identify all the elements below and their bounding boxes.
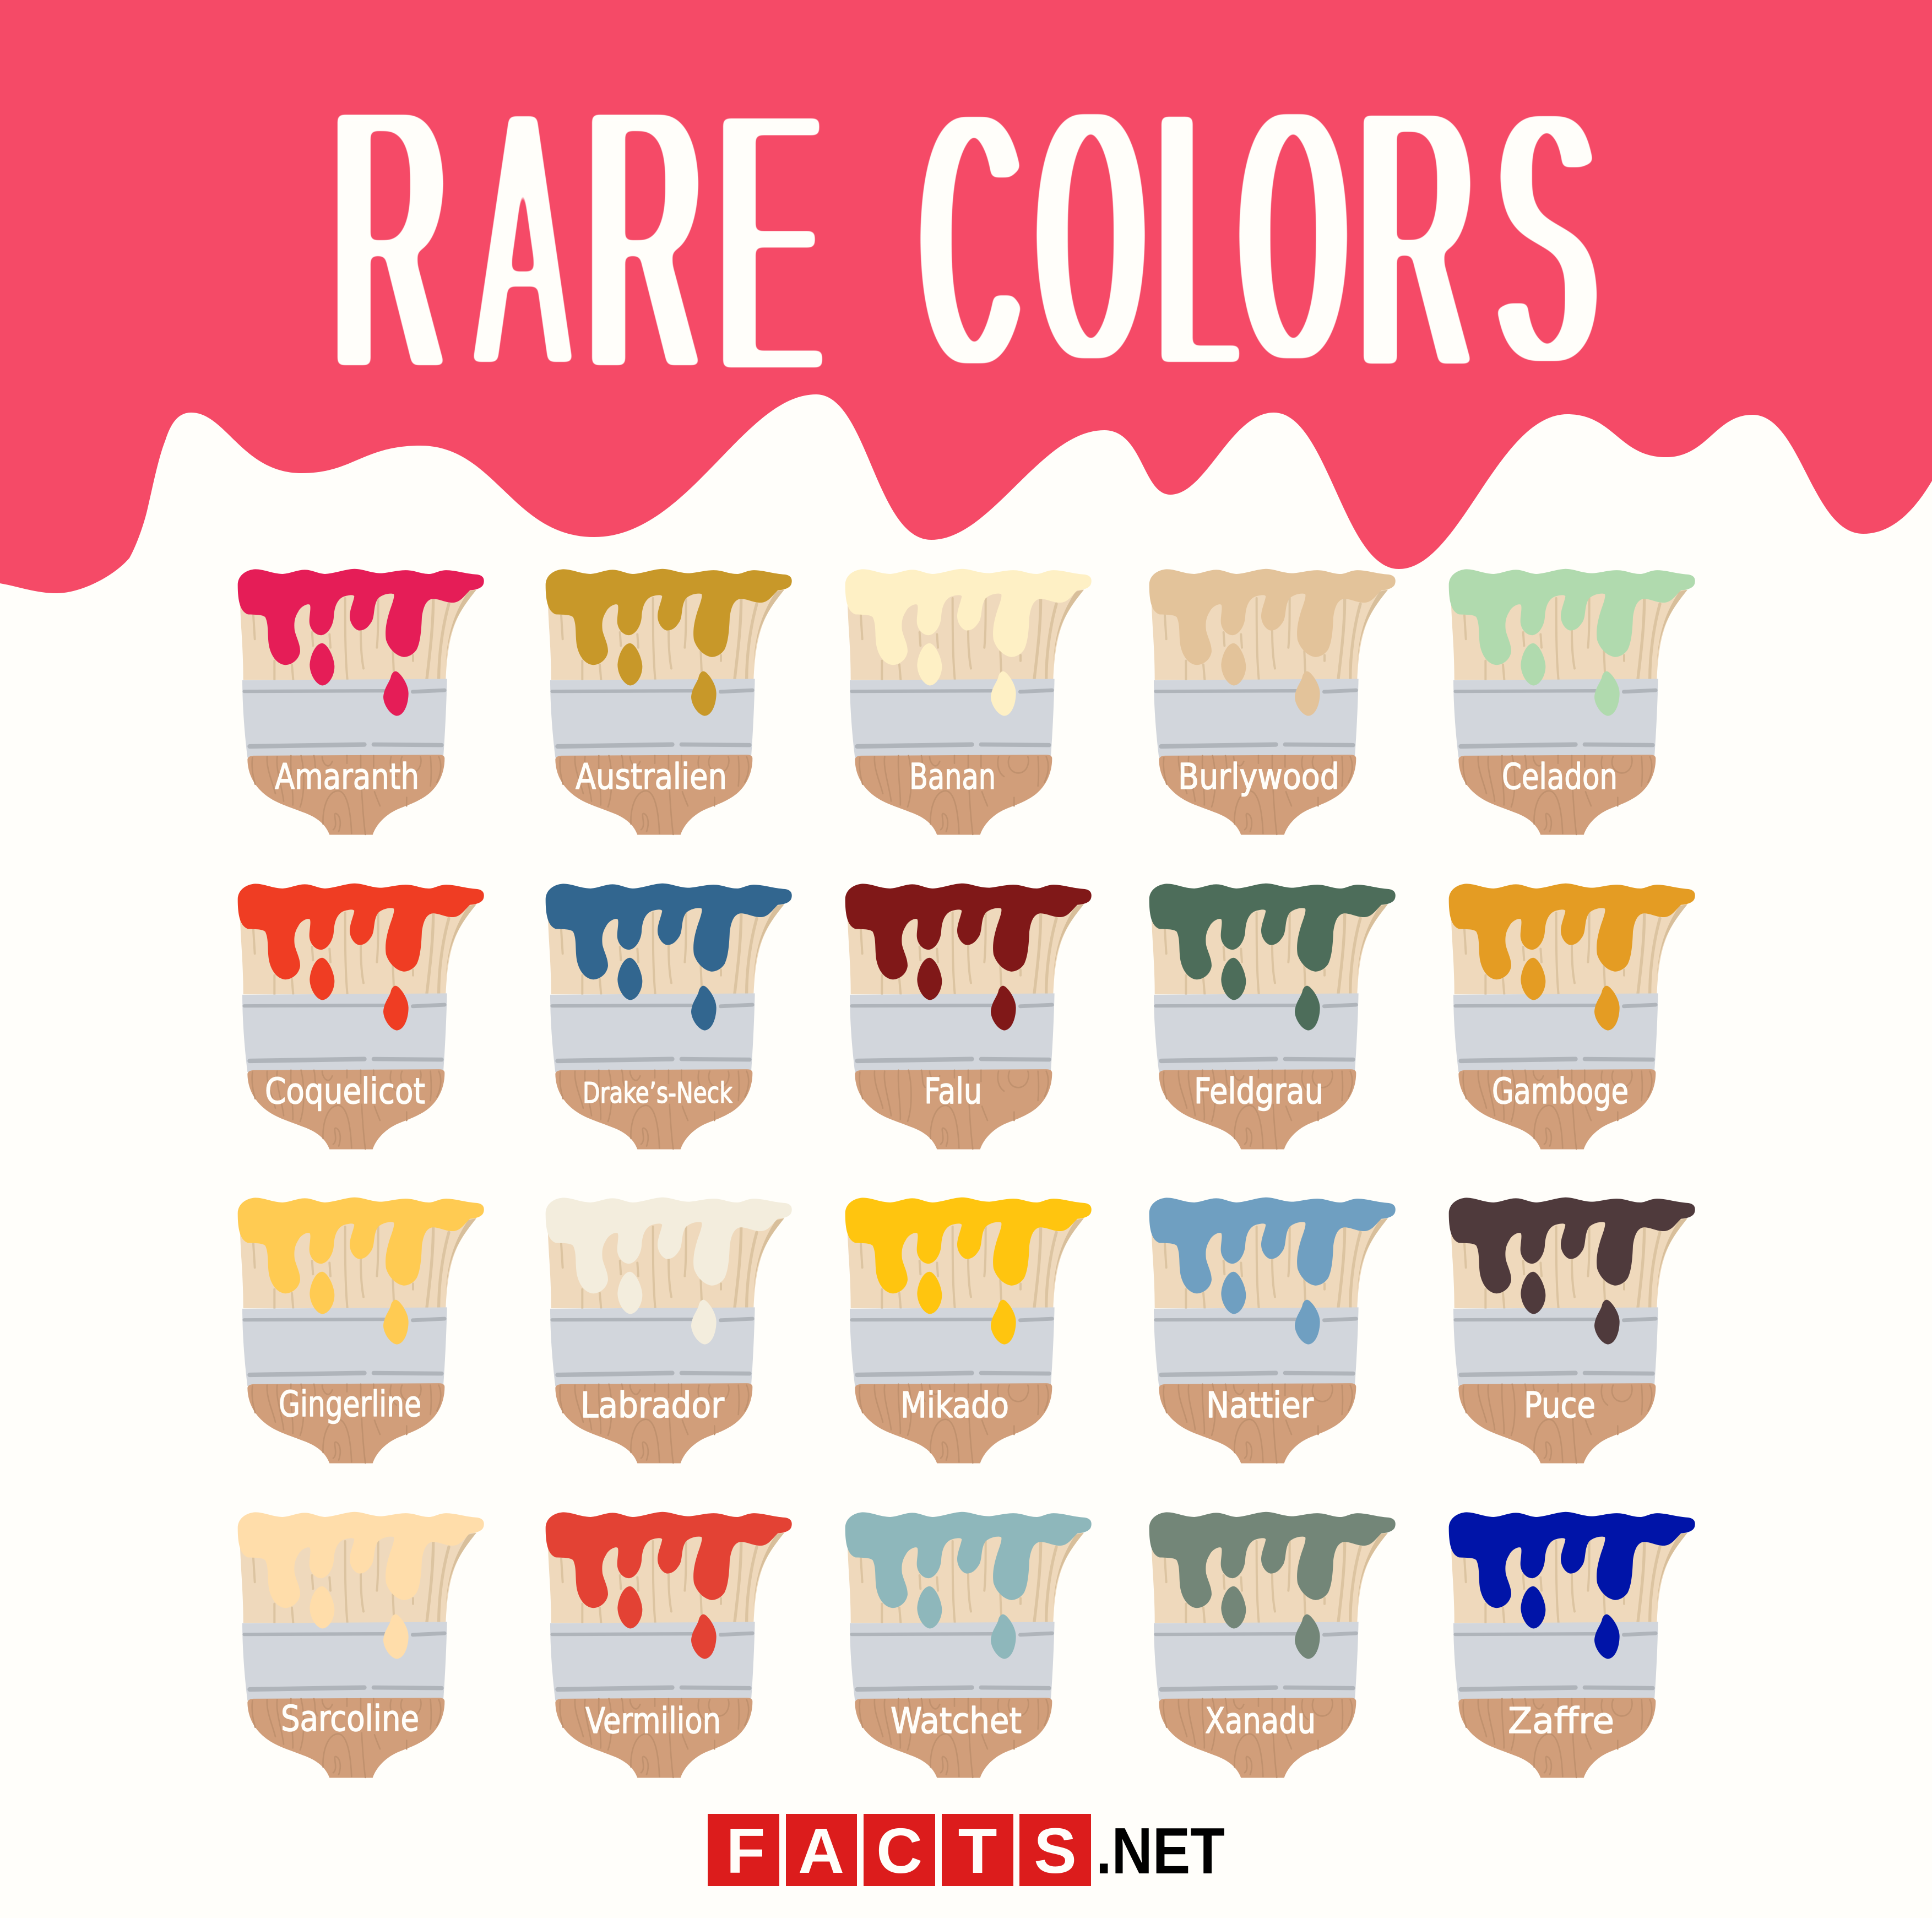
brush: Gingerline xyxy=(238,1198,484,1463)
brush: Coquelicot xyxy=(238,884,484,1149)
logo: Facts.net xyxy=(708,1814,1225,1888)
logo: Facts.net: C xyxy=(876,1815,922,1887)
brush: Puce: Puce xyxy=(1524,1385,1595,1426)
brush: Falu: Falu xyxy=(924,1071,982,1112)
brush: Sarcoline: Sarcoline xyxy=(281,1699,419,1740)
brush: Amaranth: Amaranth xyxy=(275,757,419,798)
brush: Mikado: Mikado xyxy=(900,1385,1009,1426)
brush: Banan xyxy=(845,569,1092,835)
brush: Labrador xyxy=(546,1198,792,1463)
title: R xyxy=(334,26,445,452)
brush: Nattier xyxy=(1149,1198,1396,1463)
brush: Burlywood: Burlywood xyxy=(1178,757,1339,798)
brush: Amaranth xyxy=(238,569,484,835)
brush: Watchet xyxy=(845,1512,1092,1778)
brush: Celadon: Celadon xyxy=(1502,757,1618,798)
brush: Vermilion: Vermilion xyxy=(585,1701,721,1742)
logo: Facts.net: F xyxy=(726,1815,765,1887)
brush: Xanadu: Xanadu xyxy=(1205,1701,1316,1742)
title: A xyxy=(477,30,568,448)
logo: Facts.net: T xyxy=(958,1815,997,1887)
brush: Zaffre xyxy=(1449,1512,1695,1778)
brush: Watchet: Watchet xyxy=(891,1701,1022,1742)
brush: Zaffre: Zaffre xyxy=(1508,1701,1614,1742)
title: E xyxy=(720,30,819,454)
brush: Puce xyxy=(1449,1198,1695,1463)
title: O xyxy=(1040,34,1142,438)
brush: Sarcoline xyxy=(238,1512,484,1778)
brush: Labrador: Labrador xyxy=(580,1385,725,1426)
brush: Vermilion xyxy=(546,1512,792,1778)
brush: Australien xyxy=(546,569,792,835)
title: C xyxy=(923,35,1018,443)
brush: Feldgrau: Feldgrau xyxy=(1194,1071,1323,1112)
title: R xyxy=(1360,28,1473,450)
brush: Coquelicot: Coquelicot xyxy=(265,1071,425,1112)
brush: Gamboge xyxy=(1449,884,1695,1149)
title: L xyxy=(1160,30,1234,448)
title: O xyxy=(1242,33,1344,438)
brush: Mikado xyxy=(845,1198,1092,1463)
brush: Burlywood xyxy=(1149,569,1396,835)
brush: Nattier: Nattier xyxy=(1206,1385,1314,1426)
logo: Facts.net: A xyxy=(798,1815,844,1887)
logo: Facts.net: .NET xyxy=(1096,1814,1225,1888)
brush: Falu xyxy=(845,884,1092,1149)
brush: Gingerline: Gingerline xyxy=(279,1384,421,1425)
brush: Celadon xyxy=(1449,569,1695,835)
brush: Feldgrau xyxy=(1149,884,1396,1149)
brush: Drake's-Neck xyxy=(546,884,792,1149)
brush: Xanadu xyxy=(1149,1512,1396,1778)
brush: Gamboge: Gamboge xyxy=(1492,1071,1629,1112)
brush: Australien: Australien xyxy=(576,757,727,798)
brush: Drake's-Neck: Drake’s-Neck xyxy=(583,1077,732,1110)
logo: Facts.net: S xyxy=(1034,1815,1077,1887)
title xyxy=(334,26,1594,454)
brush: Banan: Banan xyxy=(909,757,996,798)
title: S xyxy=(1499,36,1594,441)
title: R xyxy=(589,26,701,453)
header paint drip banner xyxy=(0,0,1932,593)
